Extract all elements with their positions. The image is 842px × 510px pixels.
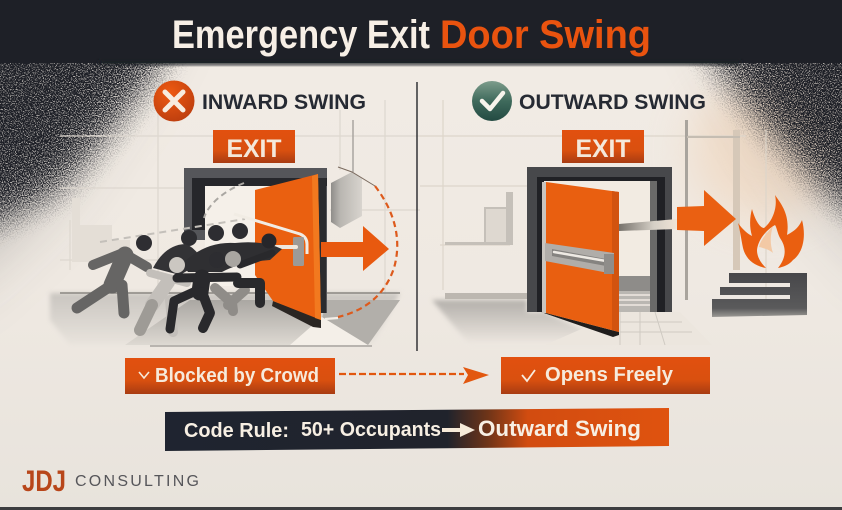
arrow: door opens against crowd xyxy=(321,226,389,271)
logo: JDJ consulting xyxy=(22,465,199,498)
heading: outward swing: OUTWARD SWING xyxy=(519,91,706,114)
callout: opens freely: Opens Freely xyxy=(545,364,674,386)
exit sign: EXIT xyxy=(576,135,630,163)
callout: code rule: 50+ Occupants xyxy=(301,419,441,441)
swing arc, dashed xyxy=(100,183,397,319)
exit sign: EXIT xyxy=(226,135,282,163)
panel: inward swing xyxy=(50,80,420,346)
icon: green check xyxy=(472,81,512,121)
logo: JDJ consulting: CONSULTING xyxy=(75,473,199,490)
background building sketch xyxy=(60,100,420,300)
floor xyxy=(432,293,712,345)
wall fixture and closer xyxy=(331,120,375,228)
title xyxy=(172,13,651,57)
panel: outward swing xyxy=(420,81,807,345)
airflow beam behind arrow xyxy=(619,219,677,231)
steps xyxy=(712,273,807,317)
callout: code rule xyxy=(165,408,669,451)
arrow: dashed connector xyxy=(339,367,489,384)
arrow: occupants to outward swing xyxy=(442,423,475,437)
background building sketch xyxy=(420,100,766,300)
person: second dark figure xyxy=(153,230,202,275)
person: pale runner front xyxy=(140,257,187,332)
door handle xyxy=(234,214,307,266)
person: middle dark group xyxy=(182,223,282,272)
person: front dark runner xyxy=(170,251,272,329)
heading: inward swing xyxy=(154,80,366,122)
door, outward swing xyxy=(541,182,619,337)
exit sign xyxy=(562,130,644,163)
door opening xyxy=(543,180,658,312)
title: Door Swing xyxy=(440,13,651,57)
person: front reaching head xyxy=(262,234,276,248)
title: Emergency Exit xyxy=(172,13,430,57)
exit sign xyxy=(213,130,295,163)
heading: outward swing xyxy=(472,81,706,121)
callout: code rule: Code Rule: xyxy=(184,420,289,442)
callout: blocked by crowd: Blocked by Crowd xyxy=(155,365,319,387)
callout: opens freely xyxy=(501,357,710,394)
crowd of people xyxy=(77,223,282,332)
icon: flame hazard xyxy=(738,195,804,268)
icon: red cross xyxy=(154,80,194,122)
floor xyxy=(50,293,400,346)
door frame xyxy=(527,167,672,312)
door, inward swing xyxy=(255,174,321,328)
person: lower grey legs xyxy=(215,288,245,311)
logo: JDJ consulting: JDJ xyxy=(22,465,66,498)
person: rear faded runner xyxy=(77,235,152,313)
callout: blocked by crowd xyxy=(125,358,335,394)
panic bar xyxy=(545,243,614,274)
heading: inward swing: INWARD SWING xyxy=(202,91,366,114)
divider xyxy=(416,82,418,351)
door frame xyxy=(184,168,327,313)
callout: code rule: Outward Swing xyxy=(478,416,641,441)
arrow: direction of egress xyxy=(677,190,736,246)
